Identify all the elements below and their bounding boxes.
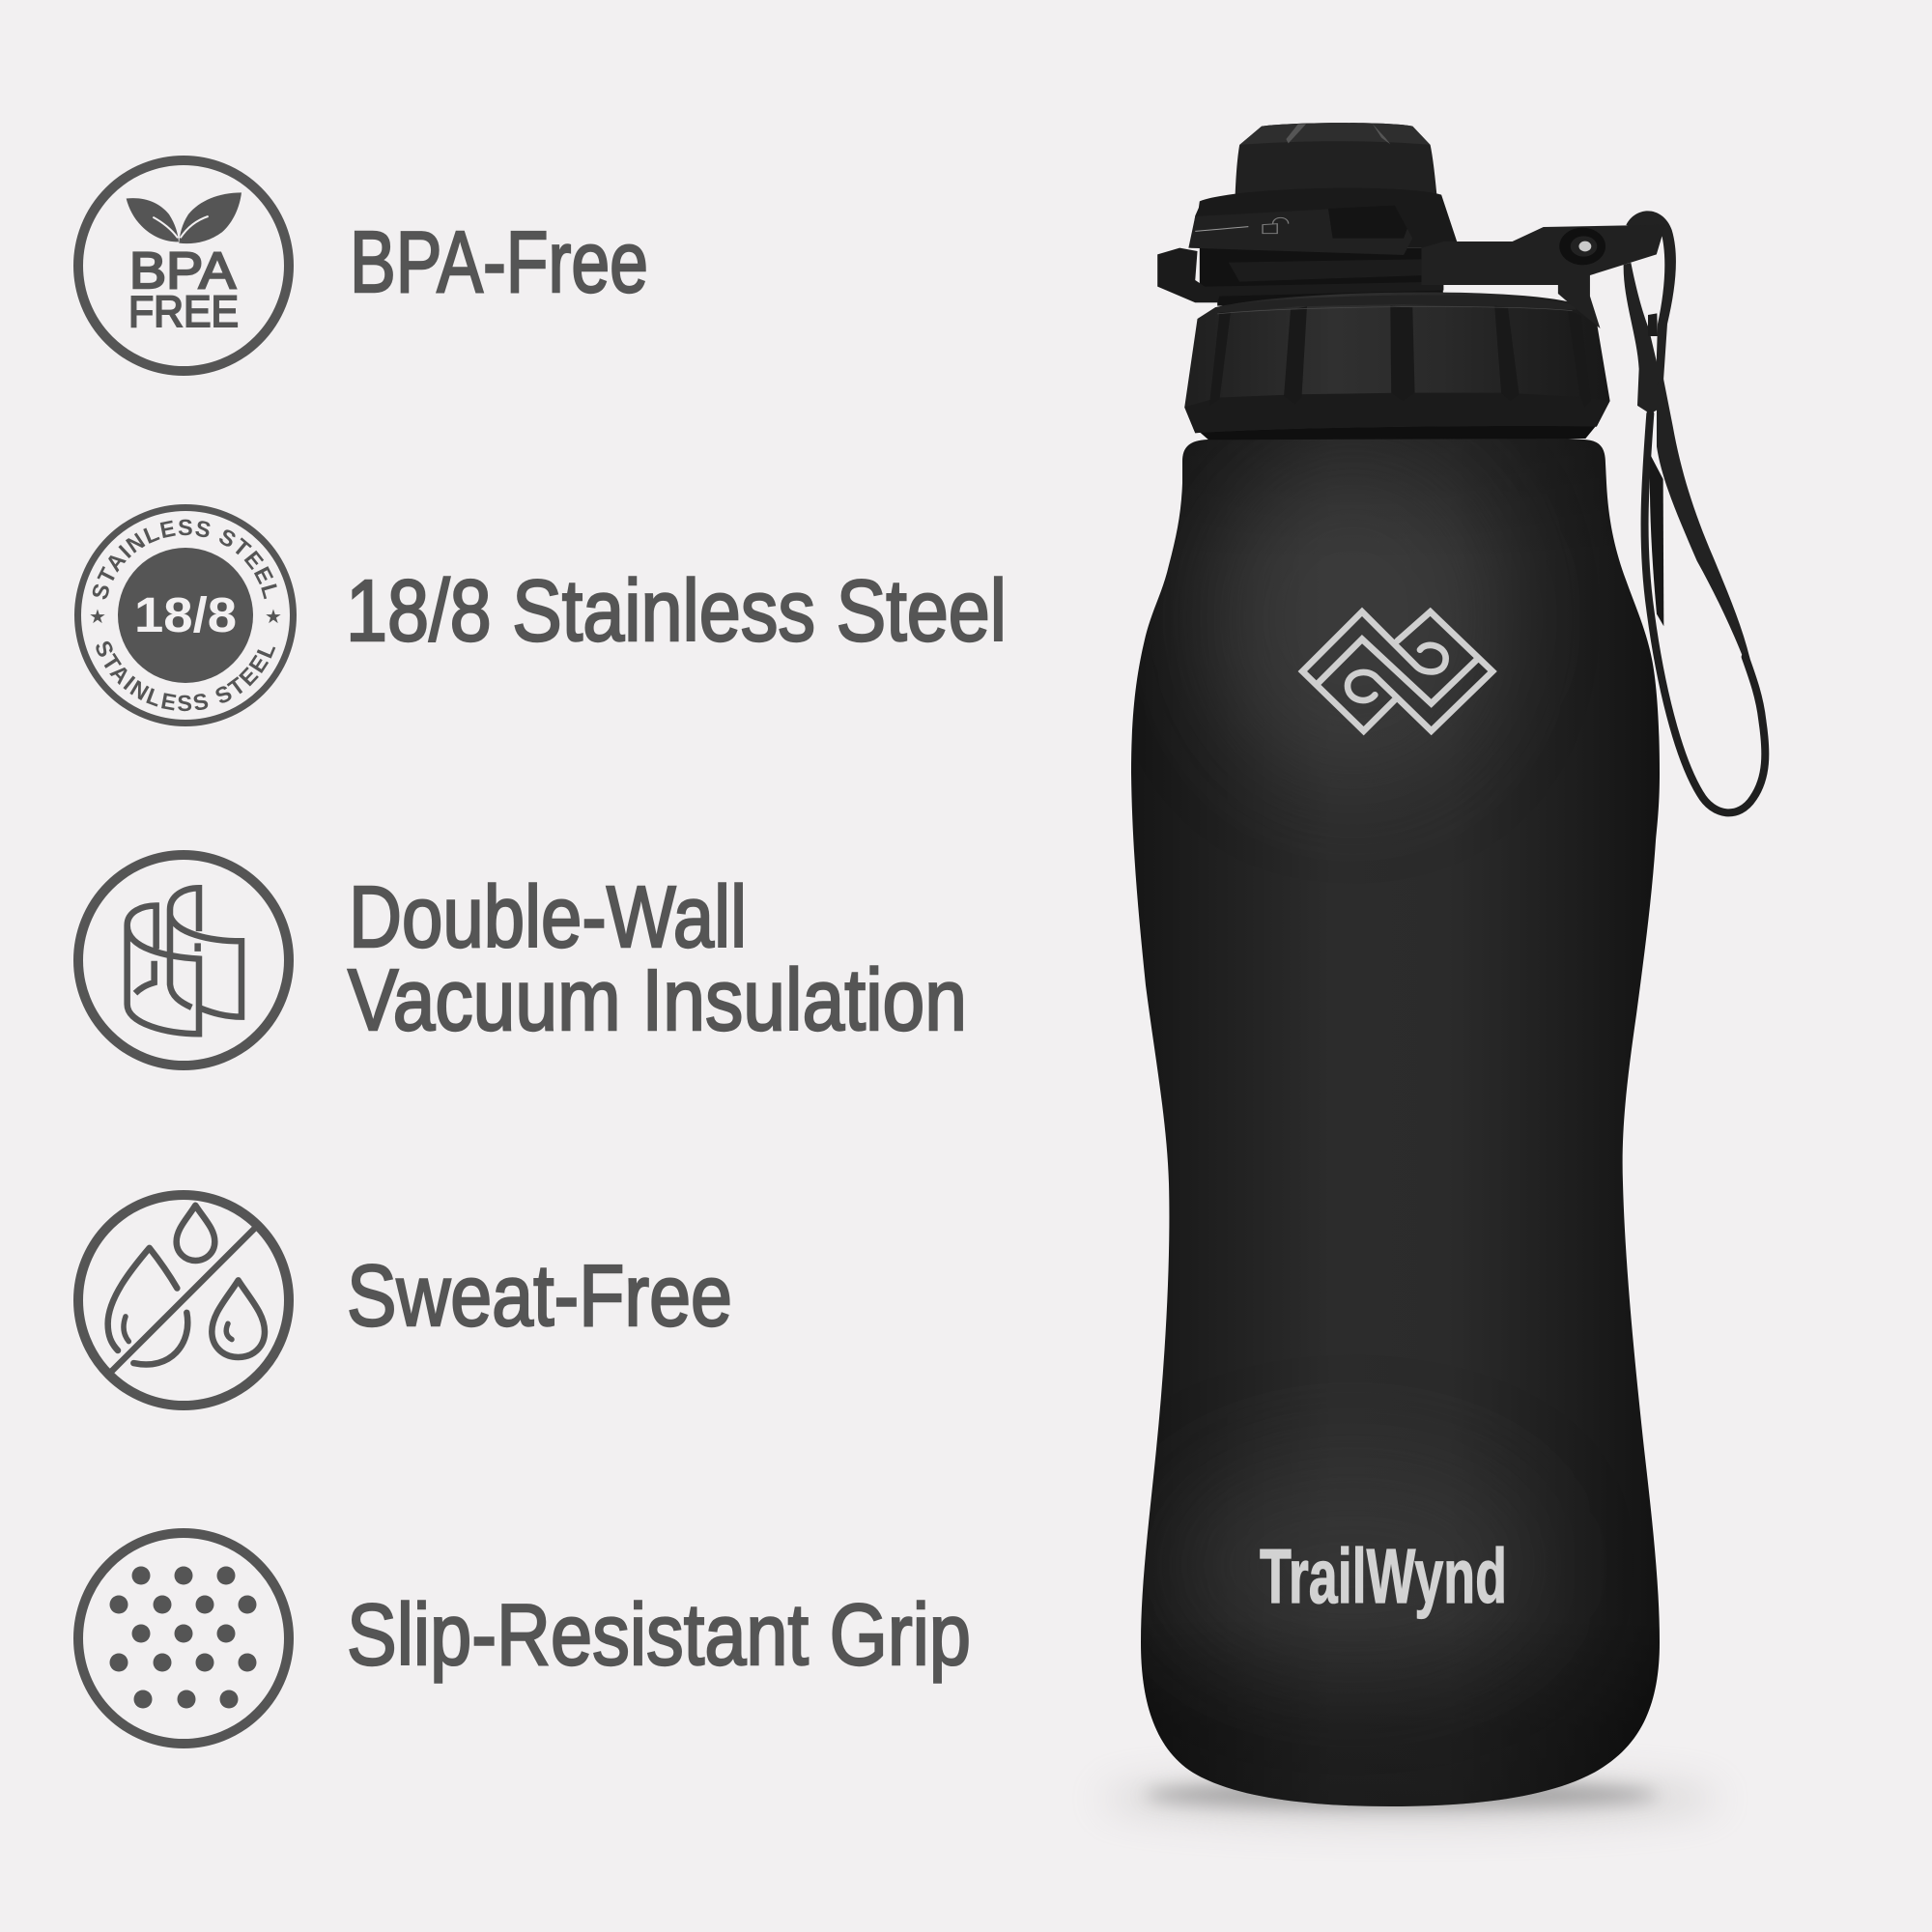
- cap: shoulder tier: [1191, 188, 1457, 248]
- infographic canvas: [73, 123, 1770, 1833]
- bottle shadow: [1101, 1776, 1719, 1822]
- feature row: 18/8 Stainless Steel: [74, 504, 1007, 726]
- label: 18/8 Stainless Steel: 18/8 Stainless Steel: [346, 563, 1007, 660]
- icon: stainless steel seal: 18/8: [134, 587, 237, 642]
- label: BPA-Free: BPA-Free: [350, 214, 648, 311]
- icon: crossed-out water drops: [78, 1195, 289, 1406]
- label: Double-Wall Vacuum Insulation: Vacuum Insulation: [348, 952, 967, 1049]
- icon: stainless steel seal: STAINLESS STEEL: [93, 520, 277, 599]
- label: Sweat-Free: Sweat-Free: [347, 1248, 732, 1345]
- cap: body ring: [1195, 424, 1597, 440]
- feature row: BPA-Free: [78, 160, 648, 371]
- cap: hinge arm: [1421, 225, 1665, 328]
- icon: BPA free leaves badge: BPA: [129, 242, 237, 299]
- label: Slip-Resistant Grip: Slip-Resistant Grip: [347, 1587, 971, 1684]
- cap: lower lock ring: [1229, 259, 1426, 282]
- icon: stainless steel seal: [74, 504, 297, 726]
- bottle logo: [1302, 611, 1492, 731]
- icon: textured grip dots: [78, 1533, 289, 1744]
- icon: BPA free leaves badge: [78, 160, 289, 371]
- bottle cap: [1157, 123, 1665, 440]
- cap: collar: [1184, 293, 1610, 433]
- feature row: Sweat-Free: [78, 1195, 732, 1406]
- feature row: Slip-Resistant Grip: [78, 1533, 971, 1744]
- feature row: Double-Wall Vacuum Insulation: [78, 855, 967, 1065]
- cap: left hook: [1157, 248, 1443, 302]
- icon: stainless steel seal: ★: [89, 607, 106, 628]
- cap: knob top: [1236, 123, 1437, 196]
- icon: BPA free leaves badge: FREE: [128, 287, 239, 336]
- strap: [1624, 211, 1765, 812]
- bottle brand name: TrailWynd: [1260, 1533, 1507, 1619]
- cap: lock band: [1188, 206, 1412, 255]
- cap: neck and inner backing: [1200, 248, 1443, 306]
- label: Double-Wall Vacuum Insulation: Double-Wall: [349, 869, 747, 966]
- icon: stainless steel seal: STAINLESS STEEL: [96, 641, 276, 711]
- icon: double wall layers: [78, 855, 289, 1065]
- icon: stainless steel seal: ★: [265, 607, 282, 628]
- label: Double-Wall Vacuum Insulation: [348, 869, 967, 1049]
- bottle body: [1131, 439, 1660, 1806]
